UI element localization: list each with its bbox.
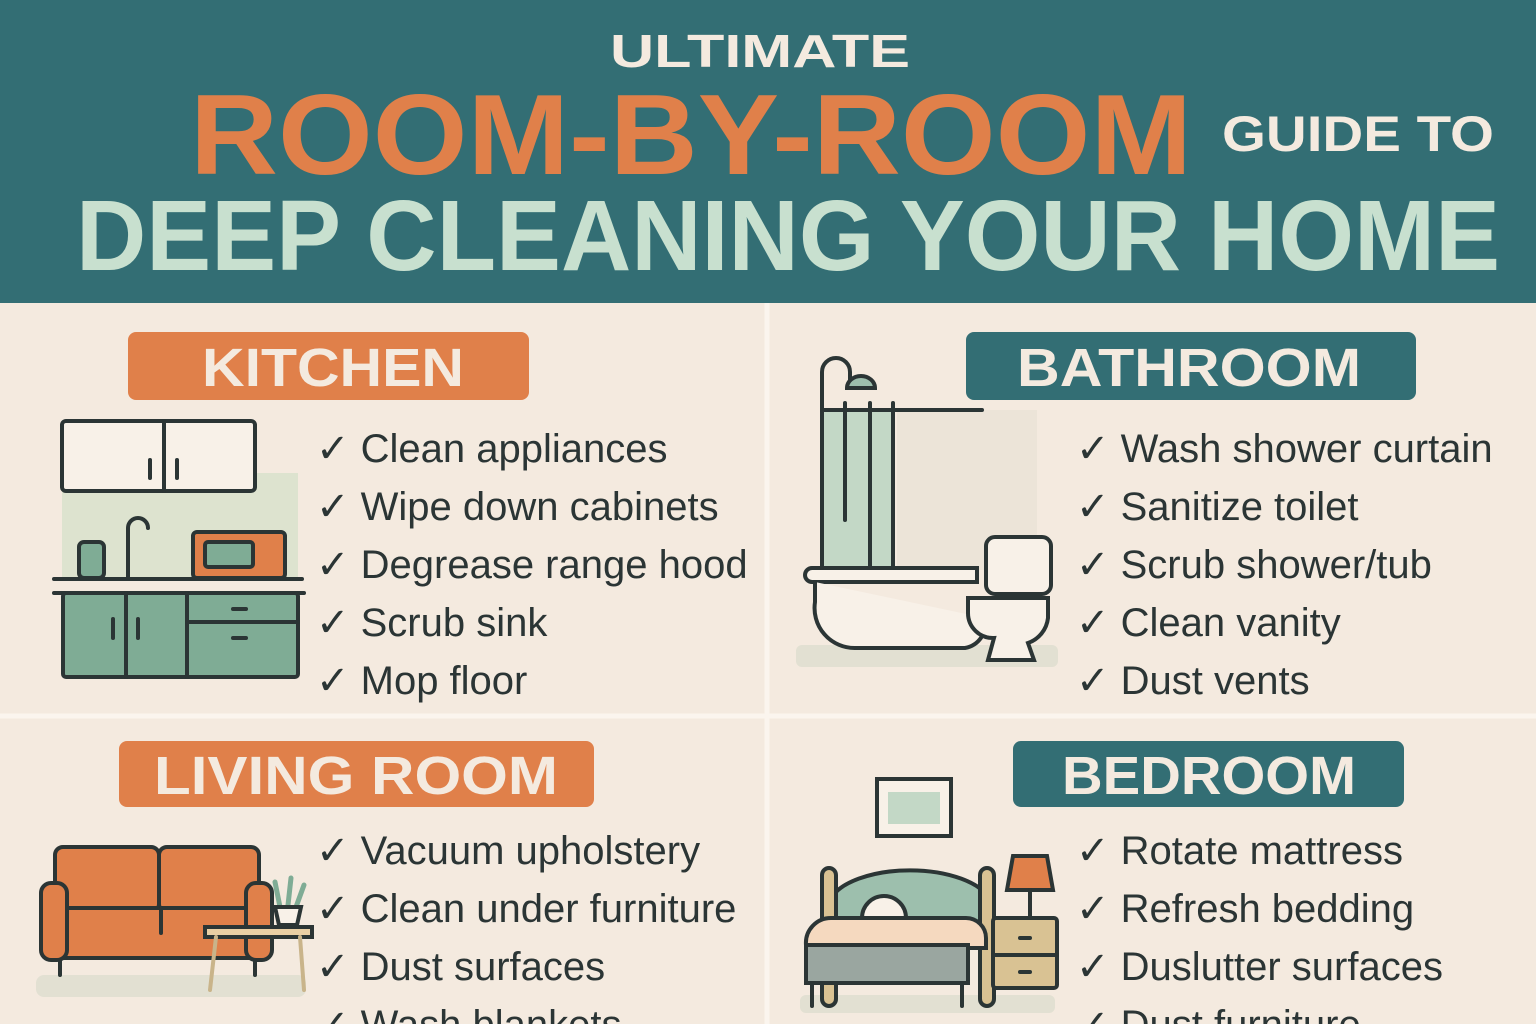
checklist: kitchen: ✓ Degrease range hood [316,543,748,587]
checklist: bathroom: ✓ Sanitize toilet [1076,485,1359,529]
checklist: bathroom: ✓ Wash shower curtain [1076,427,1493,471]
checklist: kitchen: ✓ Mop floor [316,659,527,703]
heading: bedroom: BEDROOM [1062,746,1356,806]
icon: sofa [36,847,312,997]
checklist: bedroom [1076,829,1443,1024]
heading: bathroom [966,332,1416,400]
icon: bed [800,779,1057,1013]
panel: kitchen [54,332,748,703]
checklist: kitchen: ✓ Scrub sink [316,601,548,645]
heading: bathroom: BATHROOM [1017,338,1361,398]
checklist: kitchen [316,427,748,703]
checklist: bathroom: ✓ Clean vanity [1076,601,1341,645]
title: ROOM-BY-ROOM: ROOM-BY-ROOM [190,72,1192,199]
header band [0,0,1536,303]
checklist: bedroom: ✓ Rotate mattress [1076,829,1403,873]
checklist: living room: ✓ Vacuum upholstery [316,829,700,873]
panel: bedroom [800,741,1443,1024]
heading: living room: LIVING ROOM [154,746,558,806]
checklist: bathroom [1076,427,1493,703]
checklist: kitchen: ✓ Clean appliances [316,427,668,471]
panel: living room [36,741,736,1024]
checklist: living room: ✓ Clean under furniture [316,887,736,931]
heading: kitchen: KITCHEN [202,338,464,398]
icon: bathroom [796,358,1058,667]
checklist: bedroom: ✓ Duslutter surfaces [1076,945,1443,989]
checklist: kitchen: ✓ Wipe down cabinets [316,485,719,529]
checklist: bathroom: ✓ Dust vents [1076,659,1310,703]
checklist: bedroom: ✓ Refresh bedding [1076,887,1414,931]
heading: bedroom [1013,741,1404,807]
heading: living room [119,741,594,807]
title: ULTIMATE: ULTIMATE [610,25,910,77]
checklist: bathroom: ✓ Scrub shower/tub [1076,543,1432,587]
heading: kitchen [128,332,529,400]
title: GUIDE TO: GUIDE TO [1222,106,1494,162]
checklist: living room: ✓ Dust surfaces [316,945,605,989]
icon: kitchen [54,421,304,677]
checklist: living room [316,829,736,1024]
panel: bathroom [796,332,1493,703]
title: DEEP CLEANING YOUR HOME: DEEP CLEANING YOUR HOME [76,180,1500,292]
